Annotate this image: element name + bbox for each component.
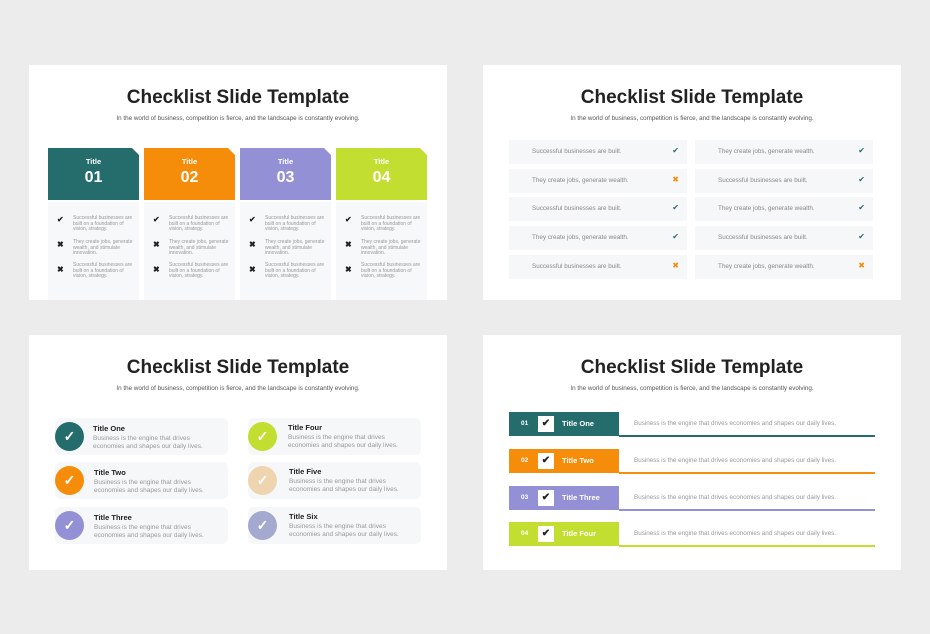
column body 1: ✔ <box>57 215 64 224</box>
item: Title Five: Business is the engine that drives economies and shapes our daily lives. <box>289 478 399 493</box>
subtitle: In the world of business, competition is fierce, and the landscape is constantly evolving. <box>116 385 360 392</box>
item: Title One: Title One <box>93 424 125 433</box>
header 02 <box>144 148 235 200</box>
right list: ✔ <box>858 146 865 155</box>
right list: Successful businesses are built. <box>718 177 808 184</box>
right list: ✔ <box>858 203 865 212</box>
item: Title Five <box>248 462 421 499</box>
item: Title Six: Title Six <box>289 512 318 521</box>
item: Title Two: Business is the engine that drives economies and shapes our daily lives. <box>94 479 204 494</box>
item: Title Two: Title Two <box>94 468 126 477</box>
item: Title Six: ✓ <box>257 517 268 533</box>
bar row 04: Title Four <box>562 529 596 538</box>
title: Checklist Slide Template <box>581 357 803 378</box>
column body 4: Successful businesses are built on a foundation of vision, strategy. <box>361 262 420 279</box>
header 01: Title <box>86 157 101 166</box>
column body 2: Successful businesses are built on a foundation of vision, strategy. <box>169 215 228 232</box>
title: Checklist Slide Template <box>127 357 349 378</box>
subtitle: In the world of business, competition is fierce, and the landscape is constantly evolving. <box>570 385 814 392</box>
column body 1 <box>48 202 139 300</box>
item: Title One: ✓ <box>64 428 75 444</box>
bar row 04: ✔ <box>542 528 550 539</box>
bar row 03: 03 <box>521 494 528 501</box>
right list: They create jobs, generate wealth. <box>718 205 815 212</box>
bar row 01: 01 <box>521 420 528 427</box>
bar row 02: ✔ <box>542 455 550 466</box>
item: Title Two: ✓ <box>64 472 75 488</box>
column body 2: ✖ <box>153 265 160 274</box>
right list <box>695 140 873 279</box>
left list: They create jobs, generate wealth. <box>532 177 629 184</box>
item: Title Three <box>55 507 228 544</box>
bar row 02: Title Two <box>562 456 594 465</box>
column body 1: ✖ <box>57 265 64 274</box>
bar row 01: Title One <box>562 419 594 428</box>
item: Title One: Business is the engine that drives economies and shapes our daily lives. <box>93 435 203 450</box>
column body 4: They create jobs, generate wealth, and stimulate innovation. <box>361 239 420 256</box>
bar row 04 <box>509 522 875 547</box>
column body 3 <box>240 202 331 300</box>
header 04: 04 <box>373 169 390 186</box>
right list: They create jobs, generate wealth. <box>718 263 815 270</box>
header 02: Title <box>182 157 197 166</box>
item: Title Four: ✓ <box>257 428 268 444</box>
column body 4: ✖ <box>345 265 352 274</box>
header 01 <box>48 148 139 200</box>
right list: ✖ <box>858 261 865 270</box>
subtitle: In the world of business, competition is fierce, and the landscape is constantly evolving. <box>570 115 814 122</box>
left list: Successful businesses are built. <box>532 148 622 155</box>
column body 1: ✖ <box>57 240 64 249</box>
item: Title Four <box>248 418 421 455</box>
item: Title Two <box>55 462 228 499</box>
bar row 03 <box>509 486 875 511</box>
slide: top-right rows <box>483 65 901 300</box>
header 04: Title <box>374 157 389 166</box>
slide: bottom-right bars <box>483 335 901 570</box>
bar row 03: Business is the engine that drives economies and shapes our daily lives. <box>634 494 836 501</box>
left list: ✖ <box>672 261 679 270</box>
column body 2: ✖ <box>153 240 160 249</box>
bar row 01 <box>509 412 875 437</box>
bar row 01: ✔ <box>542 418 550 429</box>
item: Title Five: ✓ <box>257 472 268 488</box>
item: Title Three: Title Three <box>94 513 132 522</box>
item: Title Three: Business is the engine that drives economies and shapes our daily lives. <box>94 524 204 539</box>
column body 4 <box>336 202 427 300</box>
column body 1: Successful businesses are built on a foundation of vision, strategy. <box>73 215 132 232</box>
bar row 03: Title Three <box>562 493 600 502</box>
slide: bottom-left circles <box>29 335 447 570</box>
item: Title Six <box>248 507 421 544</box>
left list: Successful businesses are built. <box>532 263 622 270</box>
column body 1: They create jobs, generate wealth, and stimulate innovation. <box>73 239 132 256</box>
column body 1: Successful businesses are built on a foundation of vision, strategy. <box>73 262 132 279</box>
left list: They create jobs, generate wealth. <box>532 234 629 241</box>
left list: Successful businesses are built. <box>532 205 622 212</box>
subtitle: In the world of business, competition is fierce, and the landscape is constantly evolving. <box>116 115 360 122</box>
header 01: 01 <box>85 169 102 186</box>
right list: Successful businesses are built. <box>718 234 808 241</box>
title: Checklist Slide Template <box>127 87 349 108</box>
header 04 <box>336 148 427 200</box>
left list: ✔ <box>672 232 679 241</box>
bar row 01: Business is the engine that drives economies and shapes our daily lives. <box>634 420 836 427</box>
item: Title One <box>55 418 228 455</box>
right list: They create jobs, generate wealth. <box>718 148 815 155</box>
column body 2: ✔ <box>153 215 160 224</box>
column body 3: They create jobs, generate wealth, and stimulate innovation. <box>265 239 324 256</box>
header 03: Title <box>278 157 293 166</box>
column body 3: ✔ <box>249 215 256 224</box>
bar row 02 <box>509 449 875 474</box>
bar row 02: Business is the engine that drives economies and shapes our daily lives. <box>634 457 836 464</box>
column body 3: Successful businesses are built on a foundation of vision, strategy. <box>265 215 324 232</box>
left list <box>509 140 687 279</box>
header 03 <box>240 148 331 200</box>
column body 4: ✔ <box>345 215 352 224</box>
bar row 04: Business is the engine that drives economies and shapes our daily lives. <box>634 530 836 537</box>
column body 3: ✖ <box>249 240 256 249</box>
title: Checklist Slide Template <box>581 87 803 108</box>
right list: ✔ <box>858 175 865 184</box>
column body 2: They create jobs, generate wealth, and stimulate innovation. <box>169 239 228 256</box>
item: Title Six: Business is the engine that drives economies and shapes our daily lives. <box>289 523 399 538</box>
bar row 03: ✔ <box>542 492 550 503</box>
item: Title Five: Title Five <box>289 467 321 476</box>
column body 4: Successful businesses are built on a foundation of vision, strategy. <box>361 215 420 232</box>
item: Title Four: Title Four <box>288 423 322 432</box>
item: Title Four: Business is the engine that drives economies and shapes our daily lives. <box>288 434 398 449</box>
column body 3: Successful businesses are built on a foundation of vision, strategy. <box>265 262 324 279</box>
left list: ✔ <box>672 203 679 212</box>
bar row 02: 02 <box>521 457 528 464</box>
bar row 04: 04 <box>521 530 528 537</box>
item: Title Three: ✓ <box>64 517 75 533</box>
right list: ✔ <box>858 232 865 241</box>
column body 2: Successful businesses are built on a foundation of vision, strategy. <box>169 262 228 279</box>
header 02: 02 <box>181 169 198 186</box>
left list: ✖ <box>672 175 679 184</box>
column body 2 <box>144 202 235 300</box>
header 03: 03 <box>277 169 294 186</box>
left list: ✔ <box>672 146 679 155</box>
column body 3: ✖ <box>249 265 256 274</box>
column body 4: ✖ <box>345 240 352 249</box>
slide: top-left columns <box>29 65 447 300</box>
